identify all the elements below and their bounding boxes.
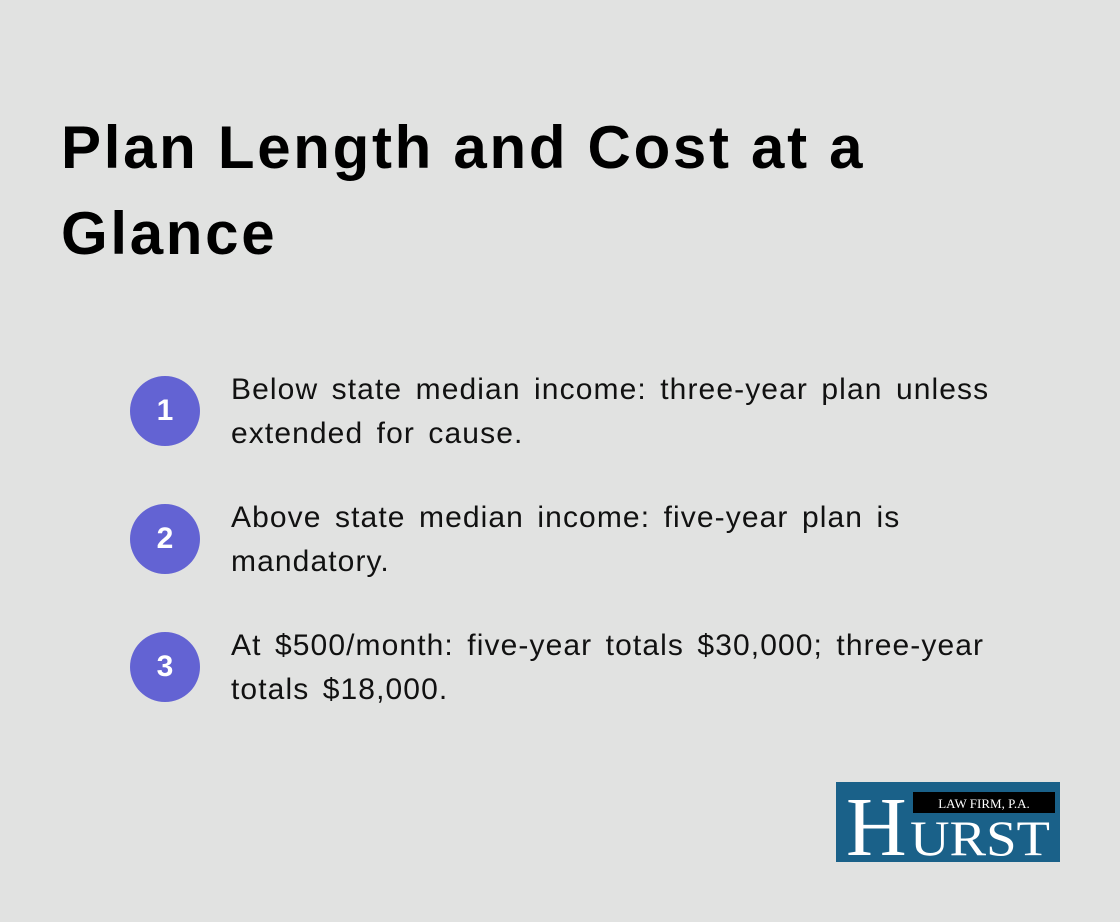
badge 1 xyxy=(130,376,200,446)
badge 1: 1 xyxy=(157,394,173,427)
text 3: At $500/month: five-year totals $30,000; three-year totals $18,000. xyxy=(231,629,984,706)
item 3 xyxy=(130,629,984,706)
badge 2: 2 xyxy=(157,522,173,555)
badge 3 xyxy=(130,632,200,702)
title: Plan Length and Cost at a Glance xyxy=(61,114,865,267)
text 2: Above state median income: five-year plan is mandatory. xyxy=(231,501,900,578)
logo xyxy=(836,782,1060,862)
item 2 xyxy=(130,501,900,578)
badge 3: 3 xyxy=(157,650,173,683)
text 1: Below state median income: three-year plan unless extended for cause. xyxy=(231,373,989,450)
badge 2 xyxy=(130,504,200,574)
logo: LAW FIRM, P.A. xyxy=(938,796,1030,811)
item 1 xyxy=(130,373,989,450)
